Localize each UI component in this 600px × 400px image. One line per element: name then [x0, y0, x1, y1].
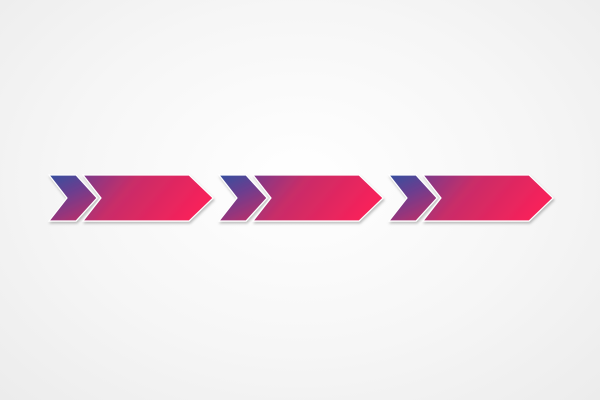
chevron 1 — [49, 175, 97, 221]
arrow 1 — [83, 175, 213, 221]
step 3 — [389, 175, 553, 221]
arrow 3 — [423, 175, 553, 221]
chevron 3 — [389, 175, 437, 221]
step 1 — [49, 175, 213, 221]
arrow 2 — [253, 175, 383, 221]
step 2 — [219, 175, 383, 221]
chevron 2 — [219, 175, 267, 221]
